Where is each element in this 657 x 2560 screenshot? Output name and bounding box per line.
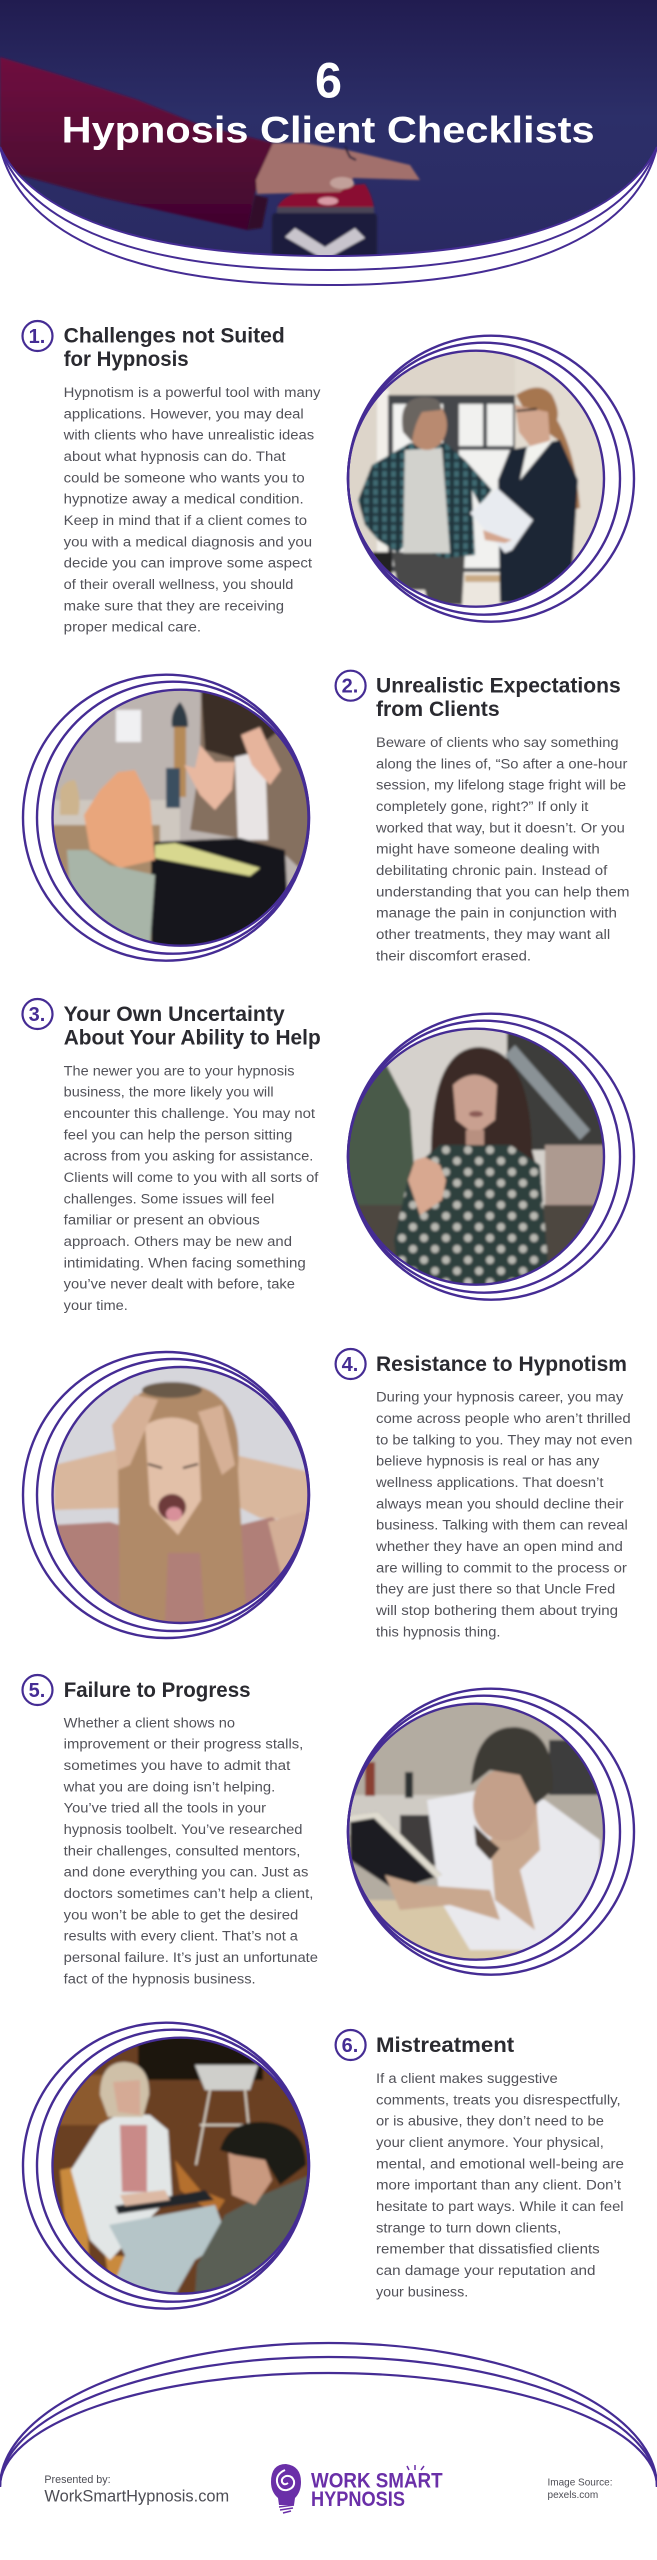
body text 4: to be talking to you. They may not even xyxy=(376,1432,632,1447)
icon: spiral light bulb xyxy=(271,2464,301,2513)
body text 3: The newer you are to your hypnosis xyxy=(64,1063,295,1078)
body text 5: you won’t be able to get the desired xyxy=(64,1907,298,1922)
footer xyxy=(0,2343,657,2513)
body text 1: hypnotize away a medical condition. xyxy=(64,492,304,507)
body text 6: your client anymore. Your physical, xyxy=(376,2135,604,2150)
heading 3: Your Own Uncertainty xyxy=(64,1003,285,1026)
logo wordmark: WORK SMART xyxy=(311,2470,443,2493)
body text 6: your business. xyxy=(376,2284,468,2299)
body text 6: hesitate to part ways. While it can feel xyxy=(376,2199,624,2214)
body text 6: comments, treats you disrespectfully, xyxy=(376,2092,621,2107)
body text 5: personal failure. It’s just an unfortunate xyxy=(64,1950,318,1965)
body text 3 xyxy=(64,1063,319,1313)
image source: pexels.com xyxy=(548,2489,598,2501)
body text 6 xyxy=(376,2071,624,2299)
panel: section 2 xyxy=(23,671,630,963)
body text 5: their challenges, consulted mentors, xyxy=(64,1843,300,1858)
body text 1: with clients who have unrealistic ideas xyxy=(63,428,315,443)
number badge 6 xyxy=(336,2030,366,2060)
body text 3: Clients will come to you with all sorts of xyxy=(64,1170,319,1185)
photo 1: man and woman talking xyxy=(349,352,603,606)
title: 6 xyxy=(315,53,342,109)
title: Hypnosis Client Checklists xyxy=(62,110,595,151)
heading 1: Challenges not Suited xyxy=(64,325,285,348)
photo 6: therapist and client xyxy=(50,2035,312,2297)
body text 1: applications. However, you may deal xyxy=(64,406,304,421)
body text 4: During your hypnosis career, you may xyxy=(376,1390,624,1405)
rings 4 xyxy=(23,1352,309,1638)
panel: section 4 xyxy=(23,1349,632,1639)
body text 1: of their overall wellness, you should xyxy=(64,577,293,592)
number badge 2: 2. xyxy=(342,676,358,698)
body text 4: business. Talking with them can reveal xyxy=(376,1518,628,1533)
body text 5: results with every client. That’s not a xyxy=(64,1929,298,1944)
body text 3: business, the more likely you will xyxy=(64,1085,274,1100)
footer curved lines xyxy=(0,2343,657,2487)
header photo: hand pressing button xyxy=(0,0,657,263)
body text 2: debilitating chronic pain. Instead of xyxy=(376,863,608,878)
body text 4 xyxy=(375,1390,632,1639)
number badge 3: 3. xyxy=(29,1004,45,1026)
panel: section 1 xyxy=(22,321,634,635)
number badge 4 xyxy=(336,1349,366,1379)
presented by: Presented by: xyxy=(44,2474,111,2486)
body text 1: proper medical care. xyxy=(64,620,201,635)
body text 5: Whether a client shows no xyxy=(64,1715,235,1730)
body text 2: completely gone, right?” If only it xyxy=(376,799,589,814)
number badge 3 xyxy=(22,999,52,1029)
heading 5: Failure to Progress xyxy=(64,1679,251,1702)
body text 2: might have someone dealing with xyxy=(376,842,600,857)
number badge 4: 4. xyxy=(342,1354,358,1376)
body text 2 xyxy=(375,735,630,963)
body text 1: you with a medical diagnosis and you xyxy=(64,534,312,549)
rings 2 xyxy=(23,675,309,961)
body text 3: across from you asking for assistance. xyxy=(64,1149,313,1164)
photo 3: woman raising hand xyxy=(345,1025,607,1290)
heading 1: for Hypnosis xyxy=(64,348,189,371)
body text 4: always mean you should decline their xyxy=(376,1496,624,1511)
body text 3: intimidating. When facing something xyxy=(64,1255,306,1270)
panel: section 5 xyxy=(22,1675,634,1986)
number badge 5: 5. xyxy=(29,1680,45,1702)
heading 2: from Clients xyxy=(376,698,500,721)
body text 2: Beware of clients who say something xyxy=(376,735,619,750)
body text 4: they are just there so that Uncle Fred xyxy=(376,1582,615,1597)
body text 6: mental, and emotional well-being are xyxy=(376,2156,624,2171)
body text 6: remember that dissatisfied clients xyxy=(376,2242,600,2257)
number badge 2 xyxy=(336,671,366,701)
body text 4: believe hypnosis is real or has any xyxy=(376,1454,600,1469)
number badge 1: 1. xyxy=(29,326,45,348)
body text 5 xyxy=(63,1715,318,1986)
body text 4: whether they have an open mind and xyxy=(375,1539,623,1554)
body text 5: what you are doing isn’t helping. xyxy=(63,1779,275,1794)
body text 6: or is abusive, they don’t need to be xyxy=(376,2114,604,2129)
body text 3: your time. xyxy=(64,1298,128,1313)
body text 2: session, my lifelong stage fright will be xyxy=(376,778,626,793)
body text 4: come across people who aren’t thrilled xyxy=(376,1411,631,1426)
body text 3: familiar or present an obvious xyxy=(64,1213,260,1228)
logo wordmark: HYPNOSIS xyxy=(311,2488,405,2511)
body text 1: decide you can improve some aspect xyxy=(64,556,312,571)
rings 5 xyxy=(348,1689,634,1975)
heading 6: Mistreatment xyxy=(376,2034,514,2057)
body text 4: are willing to commit to the process or xyxy=(376,1560,627,1575)
number badge 6: 6. xyxy=(342,2035,358,2057)
rings 6 xyxy=(23,2023,309,2309)
logo xyxy=(271,2464,443,2513)
title xyxy=(62,53,595,151)
body text 2: understanding that you can help them xyxy=(376,884,630,899)
header curved lines xyxy=(0,147,657,285)
logo wordmark xyxy=(311,2465,443,2511)
body text 4: wellness applications. That doesn’t xyxy=(375,1475,604,1490)
heading 2 xyxy=(376,675,621,721)
body text 6: more important than any client. Don’t xyxy=(376,2178,621,2193)
body text 1: make sure that they are receiving xyxy=(64,598,284,613)
heading 2: Unrealistic Expectations xyxy=(376,675,621,698)
body text 1 xyxy=(63,385,321,635)
body text 5: doctors sometimes can’t help a client, xyxy=(64,1886,313,1901)
body text 5: improvement or their progress stalls, xyxy=(64,1737,303,1752)
body text 6: If a client makes suggestive xyxy=(376,2071,558,2086)
heading 3: About Your Ability to Help xyxy=(64,1026,321,1049)
body text 5: hypnosis toolbelt. You’ve researched xyxy=(64,1822,303,1837)
panel: section 3 xyxy=(22,999,634,1313)
body text 6: can damage your reputation and xyxy=(376,2263,596,2278)
body text 2: other treatments, they may want all xyxy=(376,927,610,942)
body text 6: strange to turn down clients, xyxy=(376,2220,561,2235)
body text 3: feel you can help the person sitting xyxy=(64,1127,292,1142)
header banner xyxy=(0,0,657,285)
body text 5: and done everything you can. Just as xyxy=(64,1865,309,1880)
body text 2: worked that way, but it doesn’t. Or you xyxy=(375,820,625,835)
body text 1: about what hypnosis can do. That xyxy=(64,449,286,464)
body text 2: their discomfort erased. xyxy=(376,948,531,963)
photo 5: man reading a book xyxy=(345,1700,607,1965)
presented by: WorkSmartHypnosis.com xyxy=(44,2487,229,2506)
body text 3: approach. Others may be new and xyxy=(64,1234,292,1249)
body text 4: this hypnosis thing. xyxy=(376,1624,500,1639)
body text 1: Keep in mind that if a client comes to xyxy=(64,513,307,528)
body text 3: encounter this challenge. You may not xyxy=(64,1106,315,1121)
body text 5: You’ve tried all the tools in your xyxy=(64,1801,267,1816)
number badge 5 xyxy=(22,1675,52,1705)
rings 3 xyxy=(348,1014,634,1300)
heading 4: Resistance to Hypnotism xyxy=(376,1353,627,1376)
body text 2: along the lines of, “So after a one-hour xyxy=(376,756,628,771)
number badge 1 xyxy=(22,321,52,351)
body text 3: challenges. Some issues will feel xyxy=(64,1191,274,1206)
body text 5: fact of the hypnosis business. xyxy=(64,1971,256,1986)
image source xyxy=(548,2477,612,2501)
rings 1 xyxy=(348,336,634,622)
photo 2: hands gesturing xyxy=(50,688,312,948)
body text 2: manage the pain in conjunction with xyxy=(376,906,617,921)
body text 3: you’ve never dealt with before, take xyxy=(64,1277,295,1292)
heading 3 xyxy=(64,1003,321,1049)
presented by xyxy=(44,2474,229,2506)
body text 1: could be someone who wants you to xyxy=(64,470,305,485)
body text 4: will stop bothering them about trying xyxy=(375,1603,618,1618)
body text 5: sometimes you have to admit that xyxy=(64,1758,291,1773)
panel: section 6 xyxy=(23,2023,624,2309)
body text 1: Hypnotism is a powerful tool with many xyxy=(64,385,321,400)
image source: Image Source: xyxy=(548,2477,612,2489)
heading 1 xyxy=(64,325,285,371)
photo 4: stressed woman holding head xyxy=(50,1365,312,1630)
